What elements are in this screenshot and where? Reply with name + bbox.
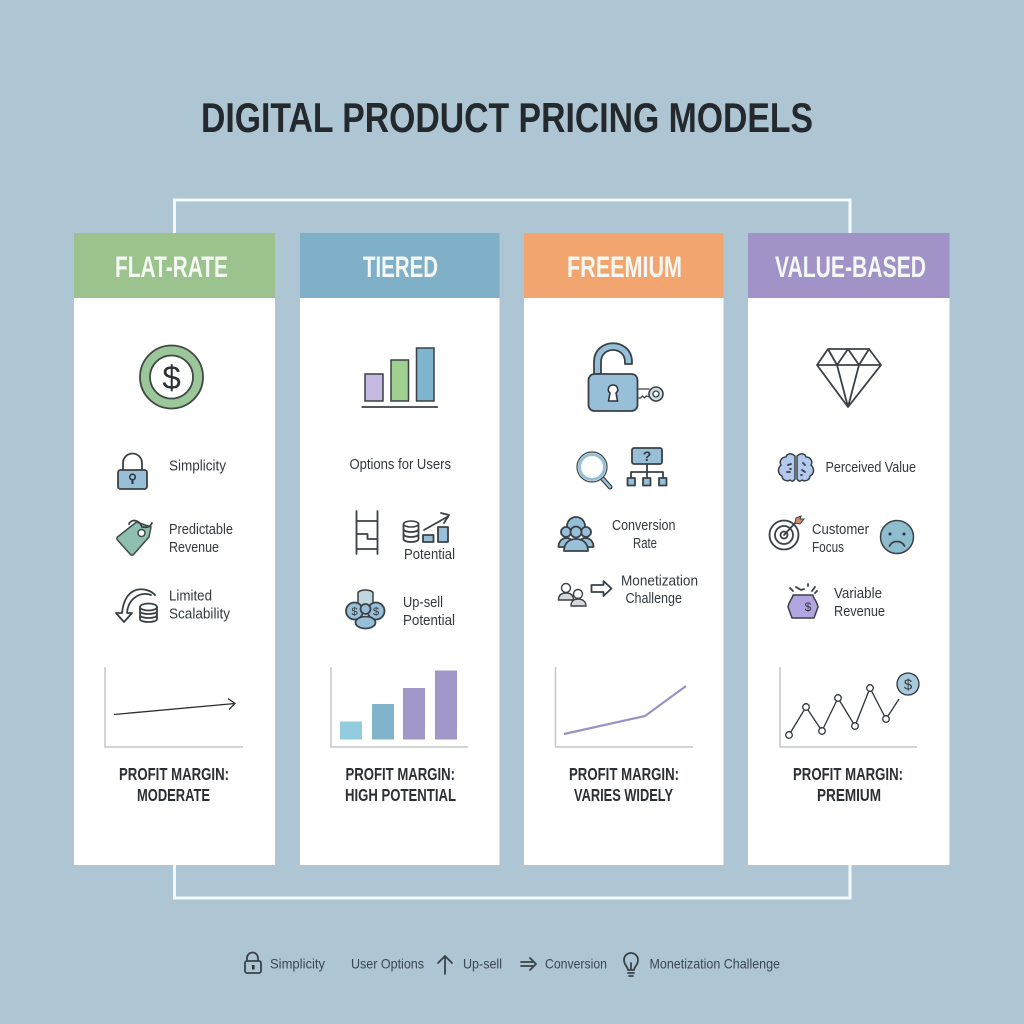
legend icon: lock [245,952,261,973]
text: monetization challenge: Challenge [626,591,682,607]
text: limited scalability: Limited [169,588,212,604]
icon: lock [118,454,147,489]
panel: freemium [524,233,724,865]
text: monetization challenge: Monetization [621,574,698,590]
text: profit margin premium: PREMIUM [817,785,881,805]
icon: open padlock and key [588,343,663,411]
legend icon: lightbulb [624,953,638,976]
icon: downward arrow and coins [116,589,157,622]
text: variable revenue [834,586,885,620]
text: profit margin high potential: PROFIT MARGIN: [346,764,455,784]
text: options for users: Options for Users [350,457,451,473]
text: profit margin moderate [119,764,229,805]
text: profit margin premium [793,764,903,805]
text: variable revenue: Variable [834,586,882,602]
chart: varying line [556,667,693,747]
icon: money bag [788,584,818,618]
text: potential: Potential [404,547,455,563]
icon: ladder [356,511,378,554]
text: conversion rate [612,518,676,552]
icon: target with arrow [770,516,804,550]
header: flat-rate: FLAT-RATE [115,251,228,284]
panel: flat-rate [74,233,275,865]
header: value-based [748,233,950,298]
icon: diamond [817,349,881,407]
icon: magnifier [577,452,610,487]
text: limited scalability: Scalability [169,606,231,622]
legend text: user options: User Options [351,956,424,972]
icon: price tag [117,521,152,555]
text: limited scalability [169,588,231,622]
legend icon: up arrow [438,956,452,974]
header: freemium: FREEMIUM [567,251,682,284]
connecting frame [174,200,850,898]
text: profit margin varies widely: VARIES WIDELY [574,785,673,805]
icon: coins with growth [404,513,449,542]
text: predictable revenue: Predictable [169,522,233,538]
text: profit margin moderate: PROFIT MARGIN: [119,764,229,784]
chart: zigzag line with dollar: $ [904,676,913,694]
legend text: monetization challenge: Monetization Challenge [650,956,780,972]
text: up-sell potential [403,595,455,629]
icon: people and money: $ [351,606,358,618]
text: profit margin high potential [345,764,456,805]
chart: rising bars [331,667,468,747]
icon: users with arrow [558,581,612,606]
text: conversion rate: Conversion [612,518,676,534]
legend text: conversion: Conversion [545,956,607,972]
legend text: simplicity: Simplicity [270,956,325,972]
text: customer focus: Customer [812,522,869,538]
legend icon: double arrow [521,958,536,970]
icon: dollar coin [140,346,203,408]
text: profit margin high potential: HIGH POTENTIAL [345,785,456,805]
icon: brain [778,454,814,481]
text: predictable revenue: Revenue [169,540,219,556]
title: DIGITAL PRODUCT PRICING MODELS [201,94,813,141]
icon: user group [558,517,594,551]
icon: dollar coin: $ [162,359,181,396]
text: profit margin moderate: MODERATE [137,785,210,805]
text: predictable revenue [169,522,233,556]
icon: money bag: $ [805,600,812,614]
text: profit margin premium: PROFIT MARGIN: [793,764,903,784]
chart: flat trend line [105,667,243,747]
text: customer focus: Focus [812,540,844,556]
header: tiered: TIERED [363,251,438,284]
icon: three bars [362,348,438,407]
header: flat-rate [74,233,275,298]
chart: zigzag line with dollar [780,667,919,747]
text: conversion rate: Rate [633,536,657,552]
text: up-sell potential: Up-sell [403,595,443,611]
icon: people and money: $ [373,606,379,618]
header: tiered [300,233,500,298]
legend text: up-sell: Up-sell [463,956,502,972]
panel: tiered [300,233,500,865]
icon: people and money [346,590,384,628]
text: perceived value: Perceived Value [826,460,916,476]
text: variable revenue: Revenue [834,604,885,620]
text: up-sell potential: Potential [403,613,455,629]
text: customer focus [812,522,869,556]
text: simplicity: Simplicity [169,458,227,474]
text: profit margin varies widely: PROFIT MARGIN: [569,764,679,784]
icon: question hierarchy [628,448,666,486]
text: monetization challenge [621,574,698,607]
header: value-based: VALUE-BASED [775,251,926,284]
legend [245,952,780,976]
panel: value-based [748,233,950,865]
icon: sad face [880,520,914,554]
header: freemium [524,233,724,298]
text: profit margin varies widely [569,764,679,805]
icon: question hierarchy: ? [643,448,651,464]
